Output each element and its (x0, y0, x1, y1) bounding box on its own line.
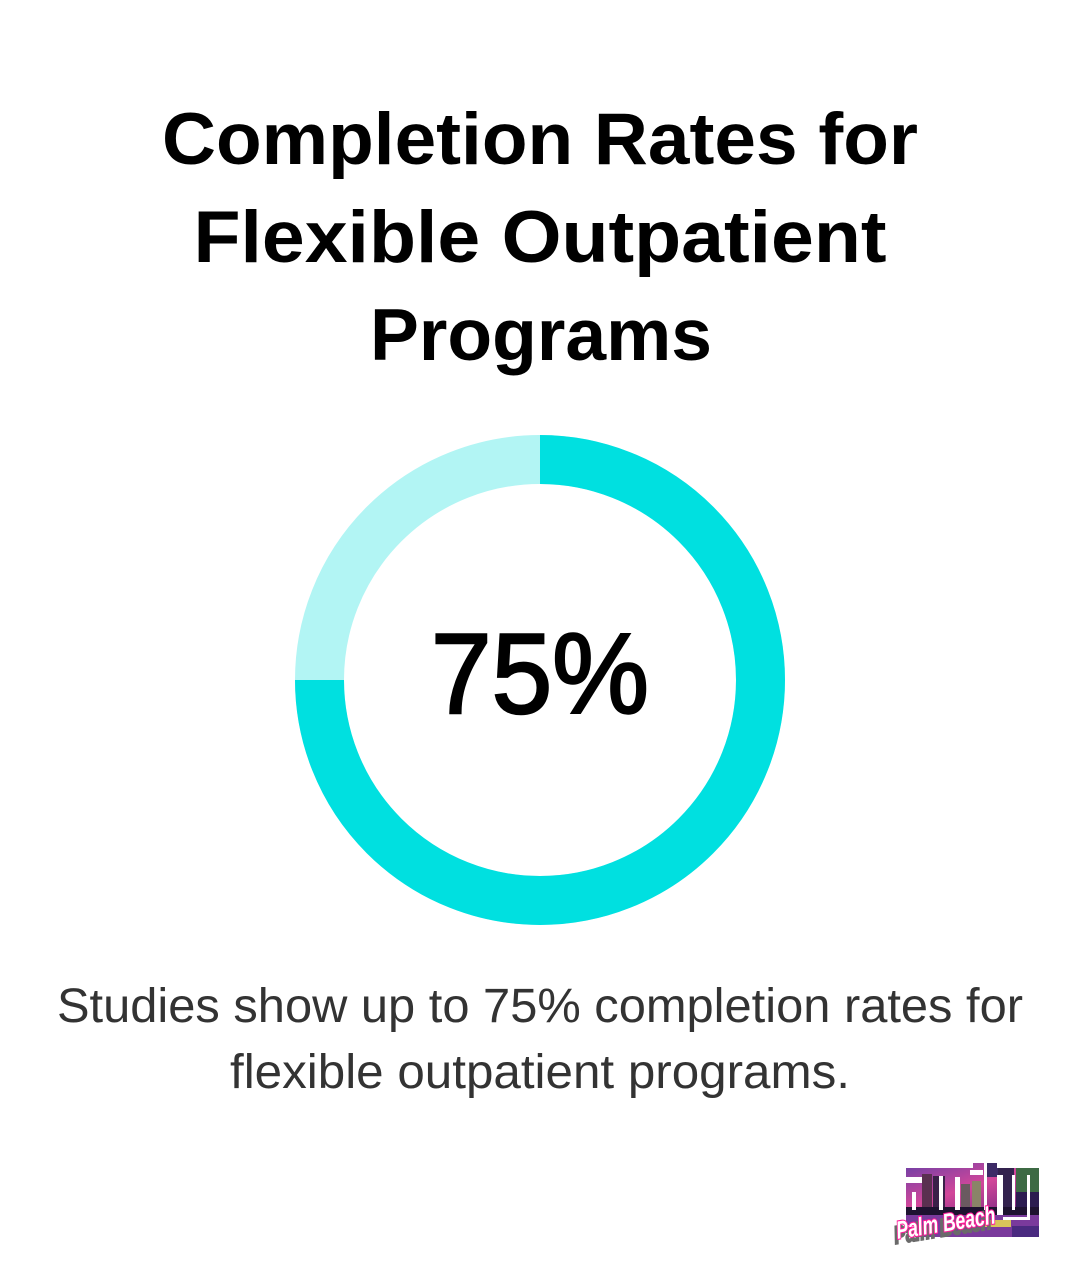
title (162, 99, 918, 376)
center value: 75% (431, 611, 649, 738)
title: Completion Rates for (162, 99, 918, 180)
description text: flexible outpatient programs. (230, 1046, 850, 1099)
donut chart: 75 percent (320, 460, 760, 901)
title: Flexible Outpatient (194, 197, 886, 278)
logo wordmark gaps (906, 1163, 1030, 1220)
description text: Studies show up to 75% completion rates for (57, 980, 1023, 1033)
logo: Amity Palm Beach (892, 1163, 1039, 1250)
logo: Amity Palm Beach: Palm Beach (892, 1207, 993, 1250)
logo: Amity Palm Beach: Palm Beach (894, 1201, 997, 1245)
description text (57, 980, 1023, 1099)
title: Programs (370, 295, 712, 376)
